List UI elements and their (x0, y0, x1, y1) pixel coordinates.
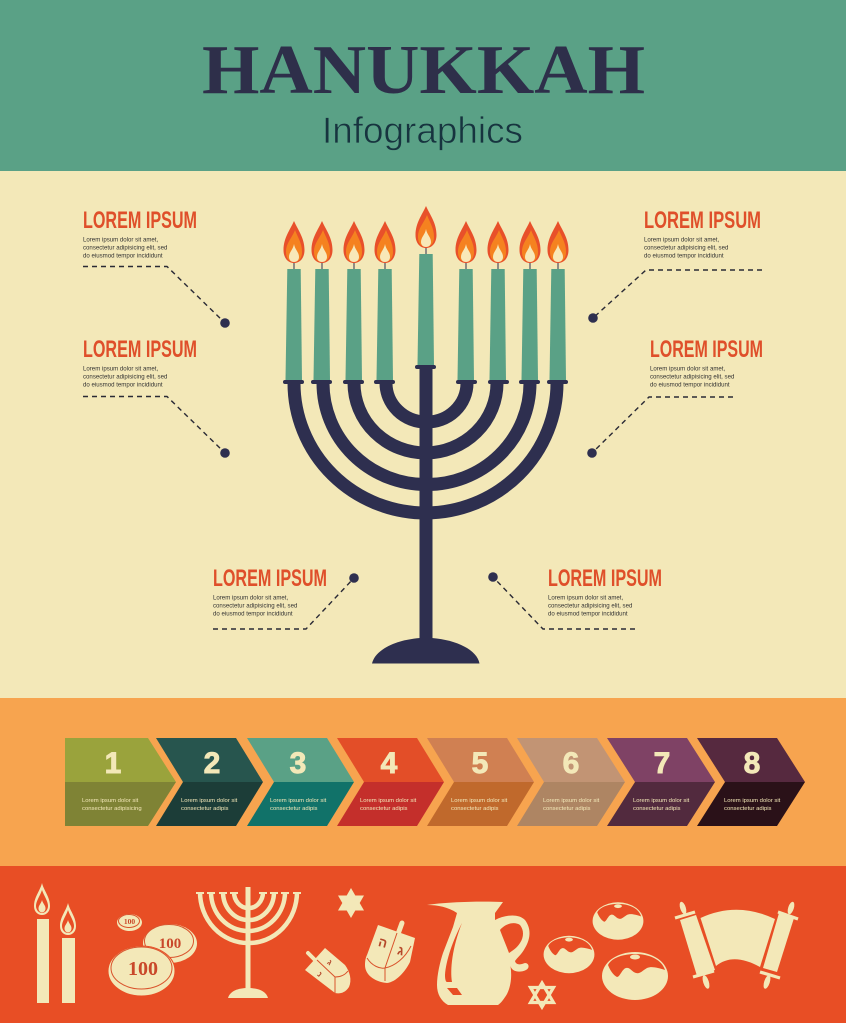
chevron 8: 8 (744, 747, 760, 780)
subtitle: Infographics (322, 110, 523, 151)
callout: middle right (587, 336, 763, 458)
chevron 1: Lorem ipsum dolor sit (82, 798, 139, 804)
chevron 1: 1 (105, 747, 121, 780)
menorah illustration (283, 206, 568, 664)
icon: coins: 100 (128, 958, 158, 980)
panel: header band (0, 0, 846, 171)
callout: middle right: LOREM IPSUM (650, 336, 763, 363)
icon: large dreidel (365, 923, 415, 983)
menorah arms (294, 383, 557, 513)
callout: middle left: Lorem ipsum dolor sit amet, (83, 366, 158, 372)
candle cups (283, 365, 568, 384)
chevron 4 (337, 738, 444, 826)
callout: middle left (83, 336, 230, 458)
chevron 6: Lorem ipsum dolor sit (543, 798, 600, 804)
chevron 2: 2 (204, 747, 220, 780)
title: HANUKKAH (202, 32, 645, 109)
icon: large dreidel: ג (396, 942, 406, 959)
chevron 5: 5 (472, 747, 488, 780)
chevron 2: Lorem ipsum dolor sit (181, 798, 238, 804)
icon: Torah scroll (675, 901, 798, 990)
callout: bottom right: LOREM IPSUM (548, 565, 662, 592)
callout: middle left: consectetur adipisicing elit, sed (83, 374, 167, 380)
callout: top left: do eiusmod tempor incididunt (83, 252, 163, 260)
callout: top left: LOREM IPSUM (83, 207, 197, 234)
callout: bottom left: Lorem ipsum dolor sit amet, (213, 594, 288, 602)
icon: coins: 100 (124, 917, 135, 926)
chevron 8 (697, 738, 805, 826)
chevron 4: 4 (381, 747, 398, 780)
callout: top right: do eiusmod tempor incididunt (644, 252, 724, 260)
chevron 7 (607, 738, 715, 826)
callout: top left: consectetur adipisicing elit, sed (83, 244, 167, 252)
callout: top left: Lorem ipsum dolor sit amet, (83, 236, 158, 244)
callout: bottom right: Lorem ipsum dolor sit amet, (548, 594, 623, 602)
icon: small dreidel: נ (315, 970, 324, 979)
chevron 5: Lorem ipsum dolor sit (451, 798, 508, 804)
chevron 8: Lorem ipsum dolor sit (724, 798, 781, 804)
callout: middle left: do eiusmod tempor incididunt (83, 382, 163, 388)
icon: coins (108, 914, 197, 996)
callout: bottom right: consectetur adipisicing elit, sed (548, 602, 632, 610)
chevron 1 (65, 738, 176, 826)
icon: oil jug (427, 902, 530, 1005)
candle flames (284, 206, 568, 269)
icon: six-pointed star (338, 888, 364, 918)
chevron 6 (517, 738, 625, 826)
chevron 5 (427, 738, 534, 826)
chevron 3: 3 (290, 747, 306, 780)
chevron 1: consectetur adipisicing (82, 806, 142, 812)
callout: top right (588, 207, 762, 323)
panel: icons band (0, 866, 846, 1023)
chevron 6: 6 (563, 747, 579, 780)
candles (286, 254, 566, 380)
callout: middle right: Lorem ipsum dolor sit amet, (650, 366, 725, 372)
callout: bottom left: LOREM IPSUM (213, 565, 327, 592)
icon: small dreidel (305, 948, 350, 993)
callout: bottom right (488, 565, 662, 629)
callout: middle right: do eiusmod tempor incididunt (650, 382, 730, 388)
icon: large dreidel: ה (377, 934, 389, 951)
icon: coins: 100 (159, 936, 181, 952)
callout: middle left: LOREM IPSUM (83, 336, 197, 363)
callout: bottom right: do eiusmod tempor incididunt (548, 610, 628, 618)
menorah stem and base (372, 366, 480, 664)
callout: top right: consectetur adipisicing elit, sed (644, 244, 728, 252)
chevron 7: Lorem ipsum dolor sit (633, 798, 690, 804)
panel: menorah background (0, 171, 846, 698)
icon: small dreidel: ג (325, 958, 334, 967)
icon: two candles (34, 883, 76, 1003)
icon: doughnuts (544, 902, 668, 1000)
chevron 2 (156, 738, 263, 826)
chevron 5: consectetur adipis (451, 806, 499, 812)
icon: star of David (530, 983, 554, 1007)
callout: bottom left: do eiusmod tempor incididunt (213, 610, 293, 618)
chevron 3 (247, 738, 354, 826)
callout: top right: LOREM IPSUM (644, 207, 761, 234)
callout: bottom left (213, 565, 359, 629)
callout: middle right: consectetur adipisicing elit, sed (650, 374, 734, 380)
chevron 7: 7 (654, 747, 670, 780)
panel: eight days band (0, 698, 846, 866)
chevron 6: consectetur adipis (543, 806, 591, 812)
callout: bottom left: consectetur adipisicing elit, sed (213, 602, 297, 610)
callout: top right: Lorem ipsum dolor sit amet, (644, 236, 719, 244)
chevron 8: consectetur adipis (724, 806, 772, 812)
chevron 3: Lorem ipsum dolor sit (270, 798, 327, 804)
chevron 2: consectetur adipis (181, 806, 229, 812)
icon: small menorah (196, 887, 301, 998)
callout: top left (83, 207, 230, 328)
chevron 4: Lorem ipsum dolor sit (360, 798, 417, 804)
chevron 7: consectetur adipis (633, 806, 681, 812)
chevron 3: consectetur adipis (270, 806, 318, 812)
chevron 4: consectetur adipis (360, 806, 408, 812)
